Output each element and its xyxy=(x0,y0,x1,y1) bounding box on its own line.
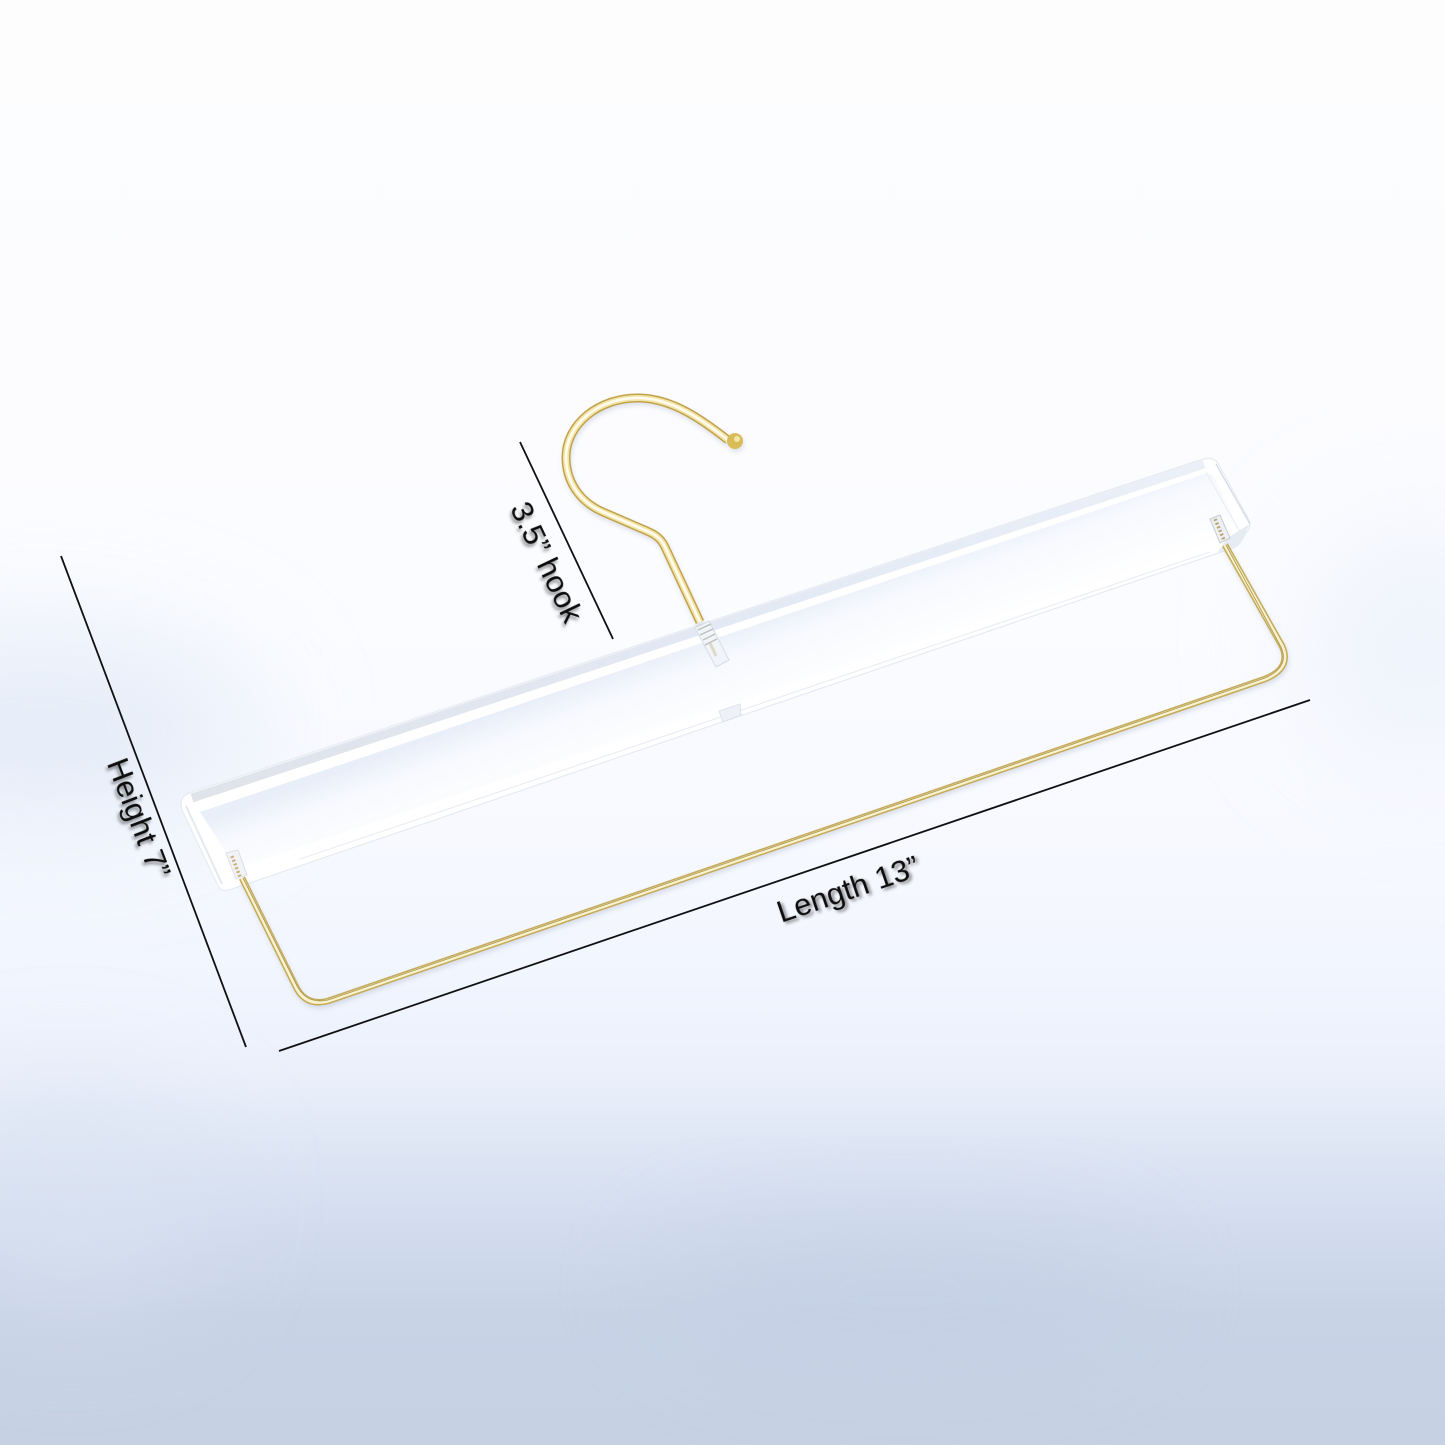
dimension line: length xyxy=(279,700,1310,1051)
dimension line: height xyxy=(61,556,246,1047)
label: height: Height 7” xyxy=(100,753,178,883)
center notch xyxy=(719,704,741,722)
acrylic hanger bar xyxy=(181,458,1250,890)
label: length: Length 13” xyxy=(772,849,924,929)
wire frame xyxy=(242,545,1285,1002)
left edge facet xyxy=(186,806,222,884)
right edge facet xyxy=(1216,464,1250,524)
hook screw xyxy=(695,621,729,667)
top edge strip xyxy=(192,464,1204,798)
right screw xyxy=(1210,515,1230,543)
hook xyxy=(566,398,743,622)
left screw xyxy=(226,850,247,879)
inner shaded face xyxy=(200,474,1238,868)
hook ball tip xyxy=(727,433,743,449)
label: hook size: 3.5” hook xyxy=(503,496,591,628)
dimension line: hook xyxy=(520,442,613,639)
lower inner line xyxy=(300,552,1210,859)
